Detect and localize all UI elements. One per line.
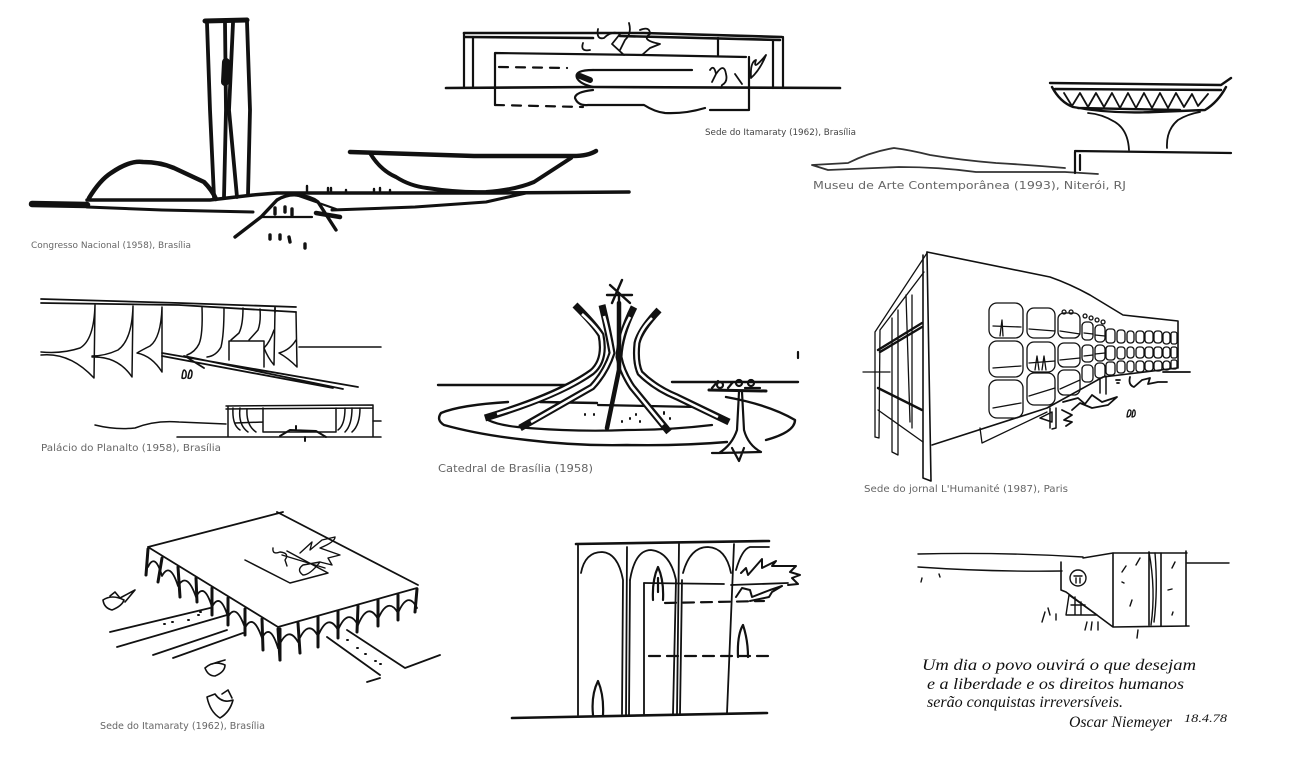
saucer [1050,78,1231,112]
building outline [927,252,1178,445]
caption: Congresso Nacional: Congresso Nacional (1958), Brasília [31,241,191,251]
dashed levels [649,601,774,656]
hillside [812,148,1098,174]
entry box [229,341,264,367]
handwritten note: Um dia o povo ouvirá o que desejam [922,657,1196,674]
handwritten note [922,657,1227,731]
window grid [989,303,1177,418]
plant [736,559,800,601]
dome [89,162,216,199]
senate bowl [350,151,596,192]
handwritten note: e a liberdade e os direitos humanos [927,676,1184,693]
handwritten note: serão conquistas irreversíveis. [927,694,1123,711]
roof garden [273,537,340,575]
roof outline [148,512,418,627]
figures [182,370,192,378]
end columns [464,33,783,88]
roof figures [1062,310,1105,324]
platform and steps [1075,151,1231,173]
inner lines [643,583,645,715]
inner volume [495,38,749,110]
water curve [575,70,705,113]
roof opening [245,551,328,583]
horizon [438,382,798,385]
roof [464,33,782,40]
ramp [162,353,358,389]
plaza ellipses [439,397,795,445]
sketch: Itamaraty aerial view [103,512,440,718]
saucer ribs [1064,93,1208,108]
ground line [32,192,629,212]
ramp mound [235,194,340,248]
sketch: Congresso Nacional [32,20,629,248]
pillars and garden [1040,376,1106,429]
people in windows [1000,320,1046,370]
sketch: Sede do jornal L'Humanité [863,252,1190,481]
crowd dots [585,412,670,422]
small figures on the plaza [307,186,390,193]
horizon [299,346,381,348]
roof slab [41,299,296,312]
stem [1088,112,1200,150]
sketch: arches detail [512,541,800,718]
road dots [164,612,381,664]
handwritten note: 18.4.78 [1184,711,1227,725]
bell tower sculpture [709,352,798,461]
flap wall [980,412,1047,443]
roof garden scribble [582,23,660,55]
columns [41,305,95,378]
twin towers [205,20,250,197]
water gardens [103,590,233,718]
corner column [923,252,931,481]
sketch: Itamaraty elevation [446,23,840,113]
handwritten note: Oscar Niemeyer [1069,714,1173,731]
caption: L'Humanité: Sede do jornal L'Humanité (1987), Paris [864,484,1068,495]
caption: Planalto: Palácio do Planalto (1958), Brasília [41,442,221,454]
caption: Catedral: Catedral de Brasília (1958) [438,463,593,475]
figures [593,567,748,715]
sketch: Palácio do Planalto [41,299,381,441]
caption: Itamaraty elevation: Sede do Itamaraty (1962), Brasília [705,128,856,138]
sketch: Memorial with handwritten note [918,551,1229,731]
front frame [863,253,927,455]
left arcade [146,549,280,660]
sketch: Catedral de Brasília [438,280,798,461]
right arcade [278,589,417,660]
star cross [607,280,632,320]
building and landscape [918,551,1229,638]
caption: Itamaraty aerial: Sede do Itamaraty (1962), Brasília [100,721,265,732]
sketch: Museu de Arte Contemporânea [812,78,1231,174]
access roads [110,608,440,682]
lower elevation [95,405,381,441]
garden plants [710,55,766,88]
cathedral ribs [485,303,729,432]
columns [578,544,734,715]
top beam and ground [512,541,769,718]
dashed lines [495,67,583,107]
caption: Museu: Museu de Arte Contemporânea (1993), Niterói, RJ [813,179,1126,192]
ground [446,87,840,88]
arches [581,547,769,714]
